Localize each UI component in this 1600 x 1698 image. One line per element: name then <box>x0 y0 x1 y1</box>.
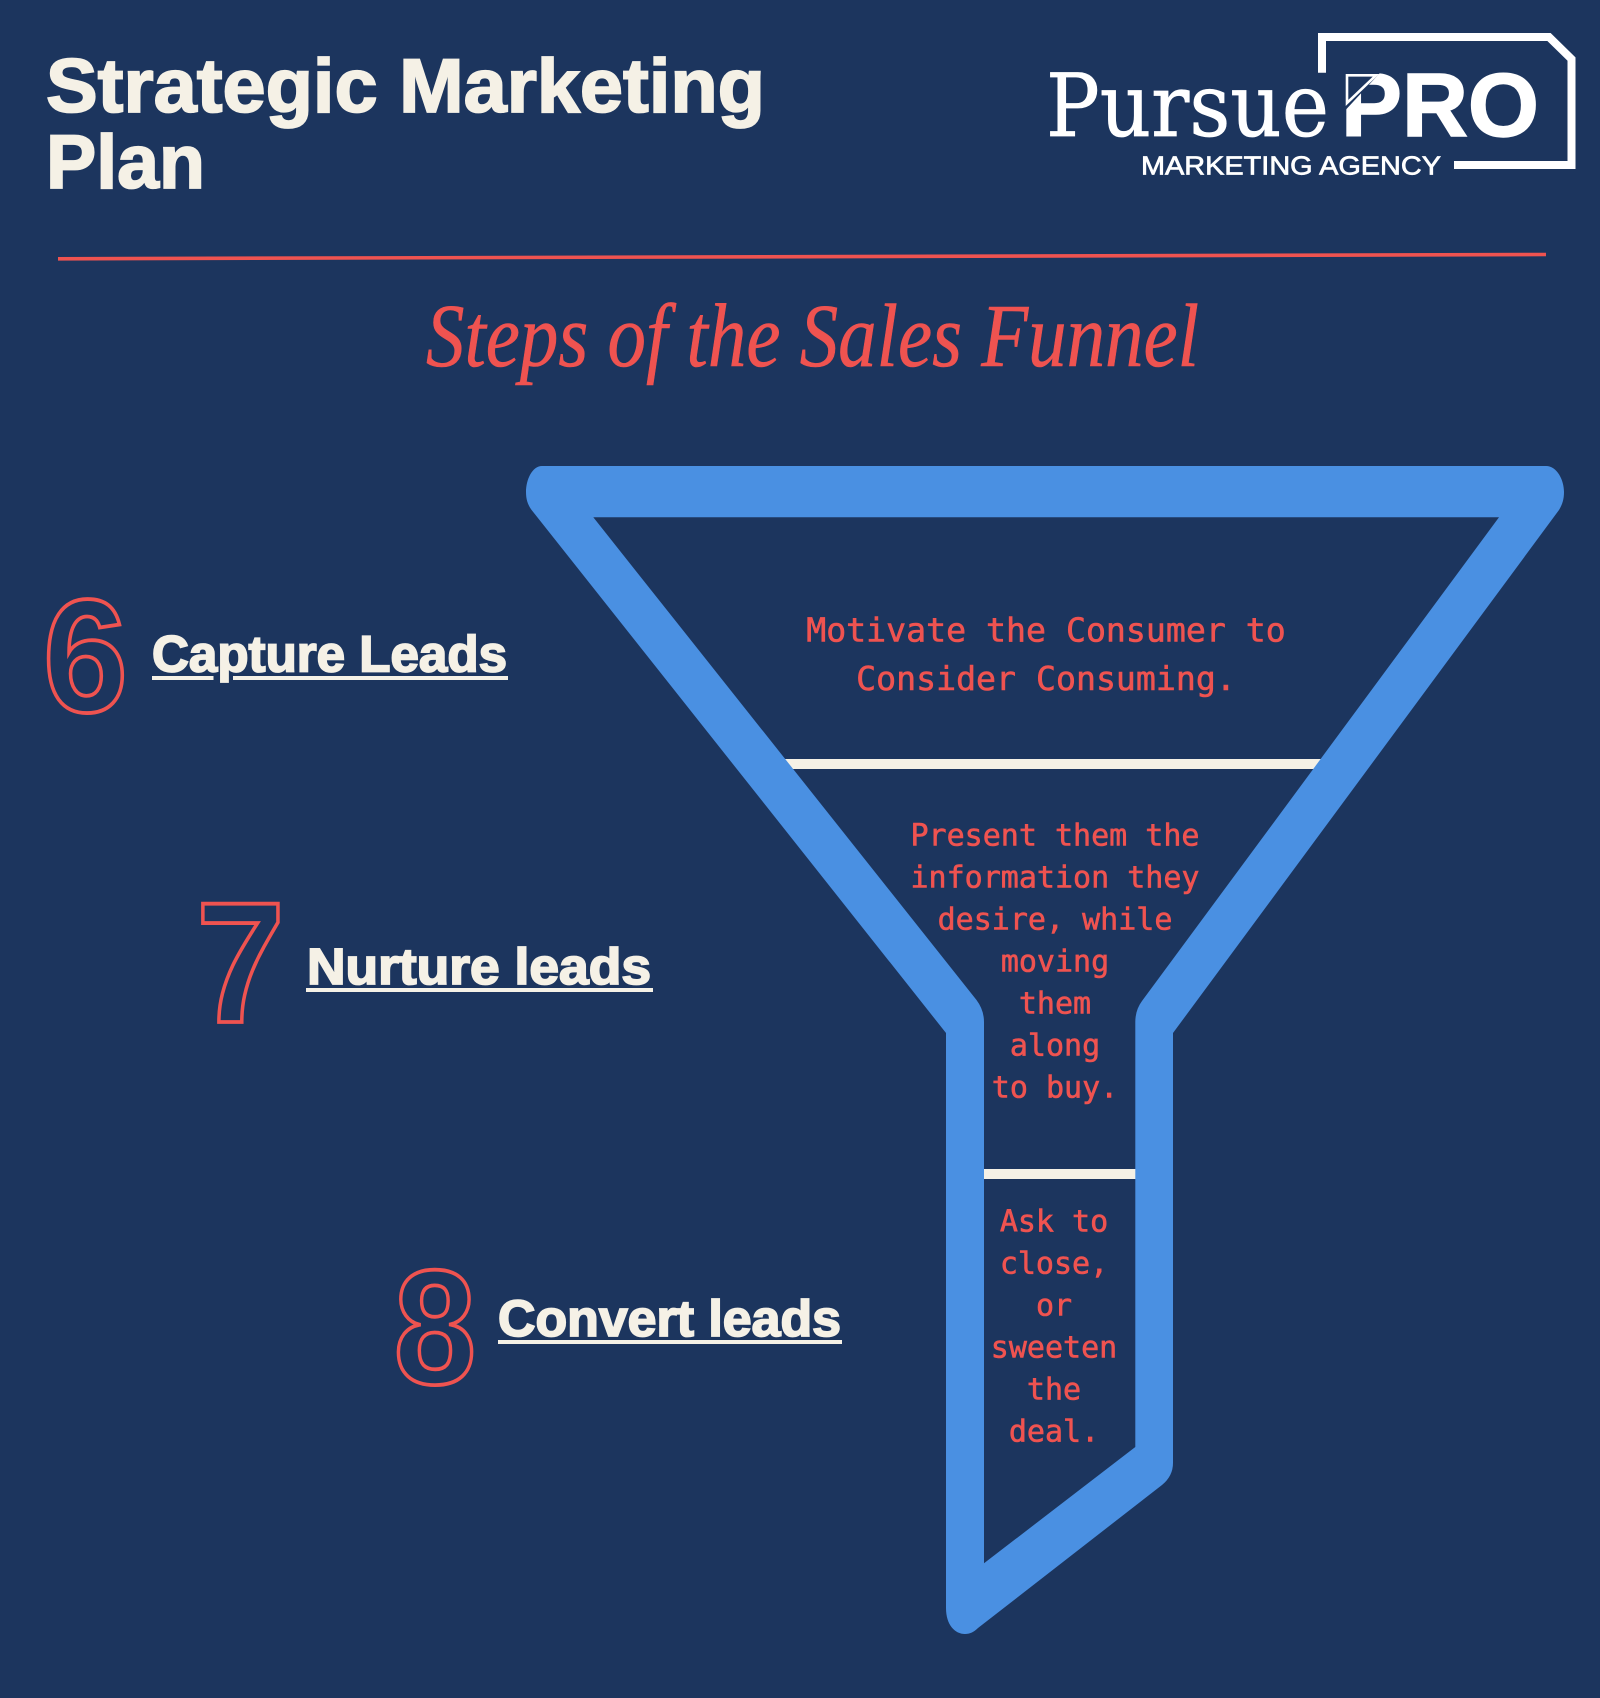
funnel text: middle stage <box>911 819 1199 1105</box>
logo: PursuePRO Marketing Agency <box>1046 37 1572 180</box>
funnel text: middle stage: moving <box>1001 945 1109 980</box>
funnel text: top stage: Consider Consuming. <box>856 659 1236 698</box>
label: Convert leads: Convert leads <box>498 1290 841 1347</box>
title: Strategic Marketing <box>46 44 765 129</box>
title: Plan <box>46 120 205 205</box>
step 8: Convert leads <box>394 1236 842 1418</box>
funnel text: bottom stage: close, <box>1000 1247 1108 1282</box>
funnel text: middle stage: along <box>1010 1028 1100 1064</box>
subtitle: Steps of the Sales Funnel <box>426 287 1199 386</box>
title <box>46 44 765 205</box>
number 6: 6 <box>43 566 128 746</box>
funnel text: bottom stage: deal. <box>1009 1415 1099 1450</box>
label: Nurture leads: Nurture leads <box>307 938 651 995</box>
logo tagline: MARKETING AGENCY <box>1141 152 1441 180</box>
logo frame <box>1322 37 1572 165</box>
funnel text: middle stage: desire, while <box>938 903 1172 938</box>
funnel text: middle stage: Present them the <box>911 819 1199 854</box>
step 6: Capture Leads <box>43 566 508 746</box>
number 8: 8 <box>394 1236 476 1418</box>
funnel text: middle stage: to buy. <box>992 1070 1118 1105</box>
step 7: Nurture leads <box>196 867 653 1059</box>
logo wordmark: Pursue: Pursue <box>1046 55 1329 157</box>
number 7: 7 <box>196 867 285 1059</box>
funnel text: bottom stage: sweeten <box>991 1331 1117 1366</box>
funnel text: middle stage: them <box>1019 986 1091 1022</box>
funnel text: middle stage: information they <box>911 861 1199 896</box>
funnel dividers <box>770 759 1335 1179</box>
red divider line <box>58 254 1546 259</box>
funnel outline <box>526 466 1564 1634</box>
funnel text: bottom stage: or <box>1036 1289 1072 1324</box>
label: Capture Leads: Capture Leads <box>152 626 507 683</box>
funnel text: bottom stage <box>991 1205 1117 1450</box>
logo wordmark: PRO: PRO <box>1341 56 1539 156</box>
funnel text: top stage: Motivate the Consumer to <box>806 611 1286 650</box>
funnel text: top stage <box>806 611 1286 698</box>
funnel text: bottom stage: Ask to <box>1000 1205 1108 1240</box>
funnel text: bottom stage: the <box>1027 1373 1081 1408</box>
